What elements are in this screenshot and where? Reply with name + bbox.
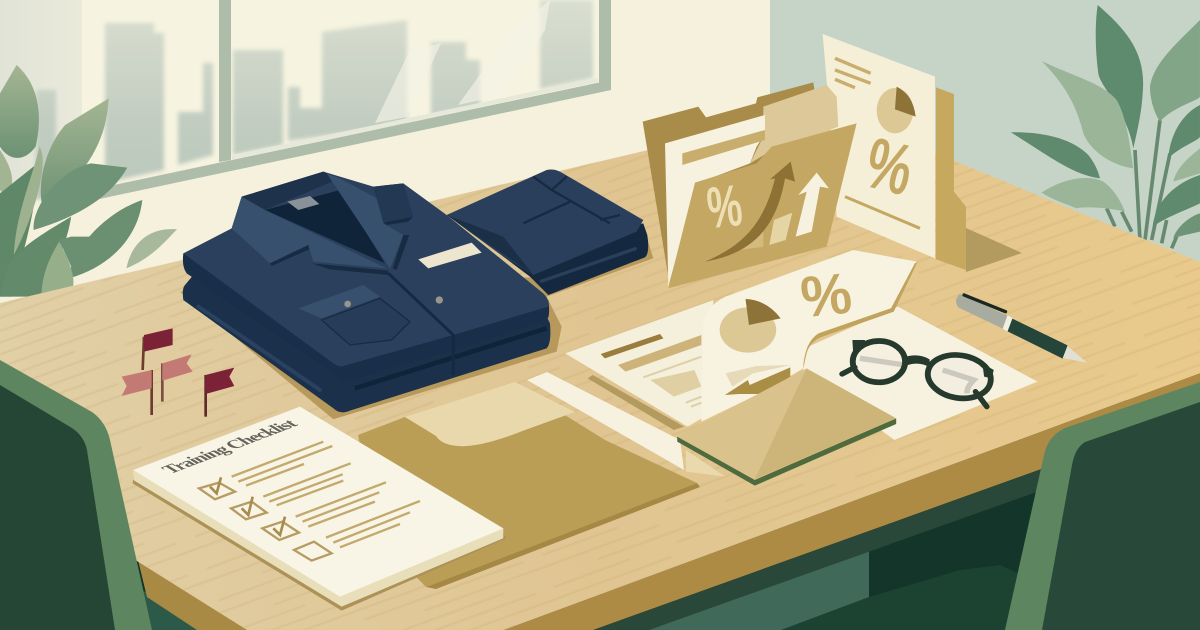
plant stems [1107,120,1177,248]
desk front apron [504,373,1200,630]
center arrow sheet: % [798,261,855,330]
window glare [375,0,550,123]
right paper [803,307,1038,440]
under-desk blob [781,565,1040,630]
front flap [668,123,857,288]
check boxes [199,477,332,561]
left paper [565,300,713,430]
collar label [287,196,319,210]
report sheet [823,34,935,258]
folded uniform [180,169,653,419]
right wall [770,0,1200,300]
checklist title: Training Checklist [157,417,304,476]
name tag [418,243,482,268]
right chair [1005,382,1200,630]
lighter drawer block [649,549,869,630]
shirt body [183,172,549,380]
pen [956,294,1087,363]
flag pink right [162,354,193,402]
under the desk [120,400,1200,630]
side binder [936,87,966,270]
big gold folder on desk [358,372,700,589]
table shadow [180,237,653,419]
flag dark [143,328,173,370]
beige sheet [750,85,838,163]
cream sheet [665,115,765,287]
folder inner tab [405,382,575,446]
back flap [643,82,817,287]
flag dark right [206,368,234,417]
standing report and folders [643,34,966,288]
wall [0,0,772,400]
center arrow sheet [701,250,918,422]
collar [232,172,413,275]
desk flags [122,328,234,417]
pocket [298,285,410,345]
window frame [219,0,611,162]
report sheet: % [858,123,921,212]
under-desk strip [593,468,1045,630]
checklist lines [232,442,420,547]
folded trousers [447,169,648,295]
window with city skyline [0,0,611,207]
standing folder shadow [966,228,1022,272]
cream strip [527,372,684,470]
lower fold [183,275,550,412]
shirt button placket [388,273,453,375]
right plant [1011,5,1200,248]
training checklist [133,407,507,611]
documents, glasses, pen group [565,250,1087,486]
desk side apron [138,560,247,630]
flag pink left [122,370,152,415]
left plant [0,65,177,297]
notebook [677,368,896,486]
left chair [0,360,152,630]
front flap: % [704,172,745,241]
button [436,296,443,304]
glasses [842,340,994,407]
